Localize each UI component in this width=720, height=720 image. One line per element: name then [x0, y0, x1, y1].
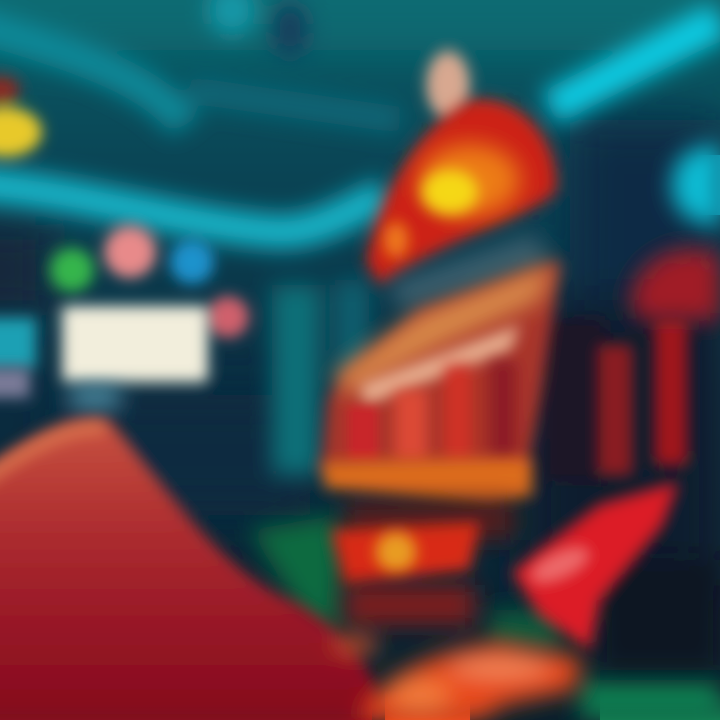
- wall screen with icons: [0, 226, 249, 409]
- machine tray: orange band: [322, 458, 532, 505]
- slot machine: [322, 51, 560, 625]
- panel: left teal screen: [0, 318, 36, 368]
- machine topper: red sign: [366, 51, 556, 285]
- red tray at right: [512, 482, 720, 670]
- floor: green carpet: [250, 515, 720, 720]
- icon: pink dot: [104, 226, 156, 278]
- machine neck: [388, 235, 550, 310]
- foreground: red cushion: [0, 420, 385, 720]
- icon: green dot: [50, 248, 94, 292]
- base: soft edge colour strips: [0, 155, 720, 720]
- teal ceiling beams: [0, 0, 720, 475]
- panel: white screen: [62, 306, 208, 382]
- icon: blue dot: [170, 240, 214, 284]
- yellow lamp at left edge: [0, 76, 42, 157]
- machine body: reels: [322, 260, 560, 480]
- foreground: orange chips: [331, 635, 582, 720]
- adjacent machine: dark red: [545, 249, 720, 480]
- icon: rose dot: [207, 296, 249, 338]
- machine base: [332, 500, 515, 625]
